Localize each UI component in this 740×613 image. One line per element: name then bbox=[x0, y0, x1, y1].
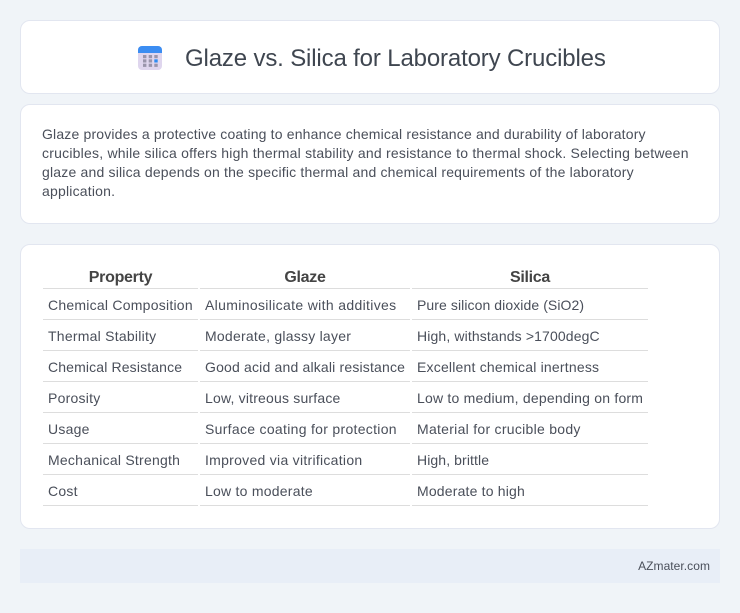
footer credit: AZmater.com bbox=[638, 559, 710, 573]
row: chemical resistance: Excellent chemical inertness bbox=[417, 359, 599, 375]
row: chemical composition: Chemical Composition bbox=[48, 297, 193, 313]
panel: title header bbox=[20, 20, 720, 94]
row: thermal stability: High, withstands >1700degC bbox=[417, 328, 600, 344]
panel: comparison table bbox=[20, 244, 720, 529]
row: chemical resistance: Good acid and alkali resistance bbox=[205, 359, 405, 375]
row: thermal stability: Moderate, glassy layer bbox=[205, 328, 351, 344]
row: usage bbox=[48, 421, 581, 437]
row: mechanical strength bbox=[48, 452, 489, 468]
row: chemical resistance bbox=[48, 359, 599, 375]
row: chemical composition bbox=[48, 297, 584, 313]
row: porosity: Low, vitreous surface bbox=[205, 390, 340, 406]
row: thermal stability: Thermal Stability bbox=[48, 328, 156, 344]
table header row bbox=[89, 269, 550, 286]
row: porosity: Porosity bbox=[48, 390, 100, 406]
row: porosity: Low to medium, depending on form bbox=[417, 390, 643, 406]
table header row: Property bbox=[89, 269, 152, 286]
row: cost: Low to moderate bbox=[205, 483, 313, 499]
row: thermal stability bbox=[48, 328, 600, 344]
row: usage: Usage bbox=[48, 421, 90, 437]
summary text: crucibles, while silica offers high thermal stability and resistance to thermal shock. Selecting between bbox=[42, 145, 689, 161]
footer bar bbox=[20, 549, 720, 583]
table header row: Glaze bbox=[284, 269, 326, 286]
row: cost: Cost bbox=[48, 483, 78, 499]
row: mechanical strength: High, brittle bbox=[417, 452, 489, 468]
row: chemical composition: Aluminosilicate with additives bbox=[205, 297, 397, 313]
row: chemical composition: Pure silicon dioxide (SiO2) bbox=[417, 297, 584, 313]
panel: summary bbox=[20, 104, 720, 224]
row: cost: Moderate to high bbox=[417, 483, 525, 499]
row: usage: Material for crucible body bbox=[417, 421, 581, 437]
row: cost bbox=[48, 483, 525, 499]
summary text: application. bbox=[42, 183, 115, 199]
row: chemical resistance: Chemical Resistance bbox=[48, 359, 182, 375]
table header row: Silica bbox=[510, 269, 550, 286]
row: porosity bbox=[48, 390, 643, 406]
row: usage: Surface coating for protection bbox=[205, 421, 397, 437]
row: mechanical strength: Mechanical Strength bbox=[48, 452, 180, 468]
summary text: Glaze provides a protective coating to enhance chemical resistance and durability of laboratory bbox=[42, 126, 646, 142]
summary text: glaze and silica depends on the specific thermal and chemical requirements of the laboratory bbox=[42, 164, 634, 180]
title: Glaze vs. Silica for Laboratory Crucibles bbox=[185, 45, 606, 72]
icon: calendar bbox=[138, 46, 162, 70]
row: mechanical strength: Improved via vitrification bbox=[205, 452, 362, 468]
summary text bbox=[42, 126, 689, 199]
